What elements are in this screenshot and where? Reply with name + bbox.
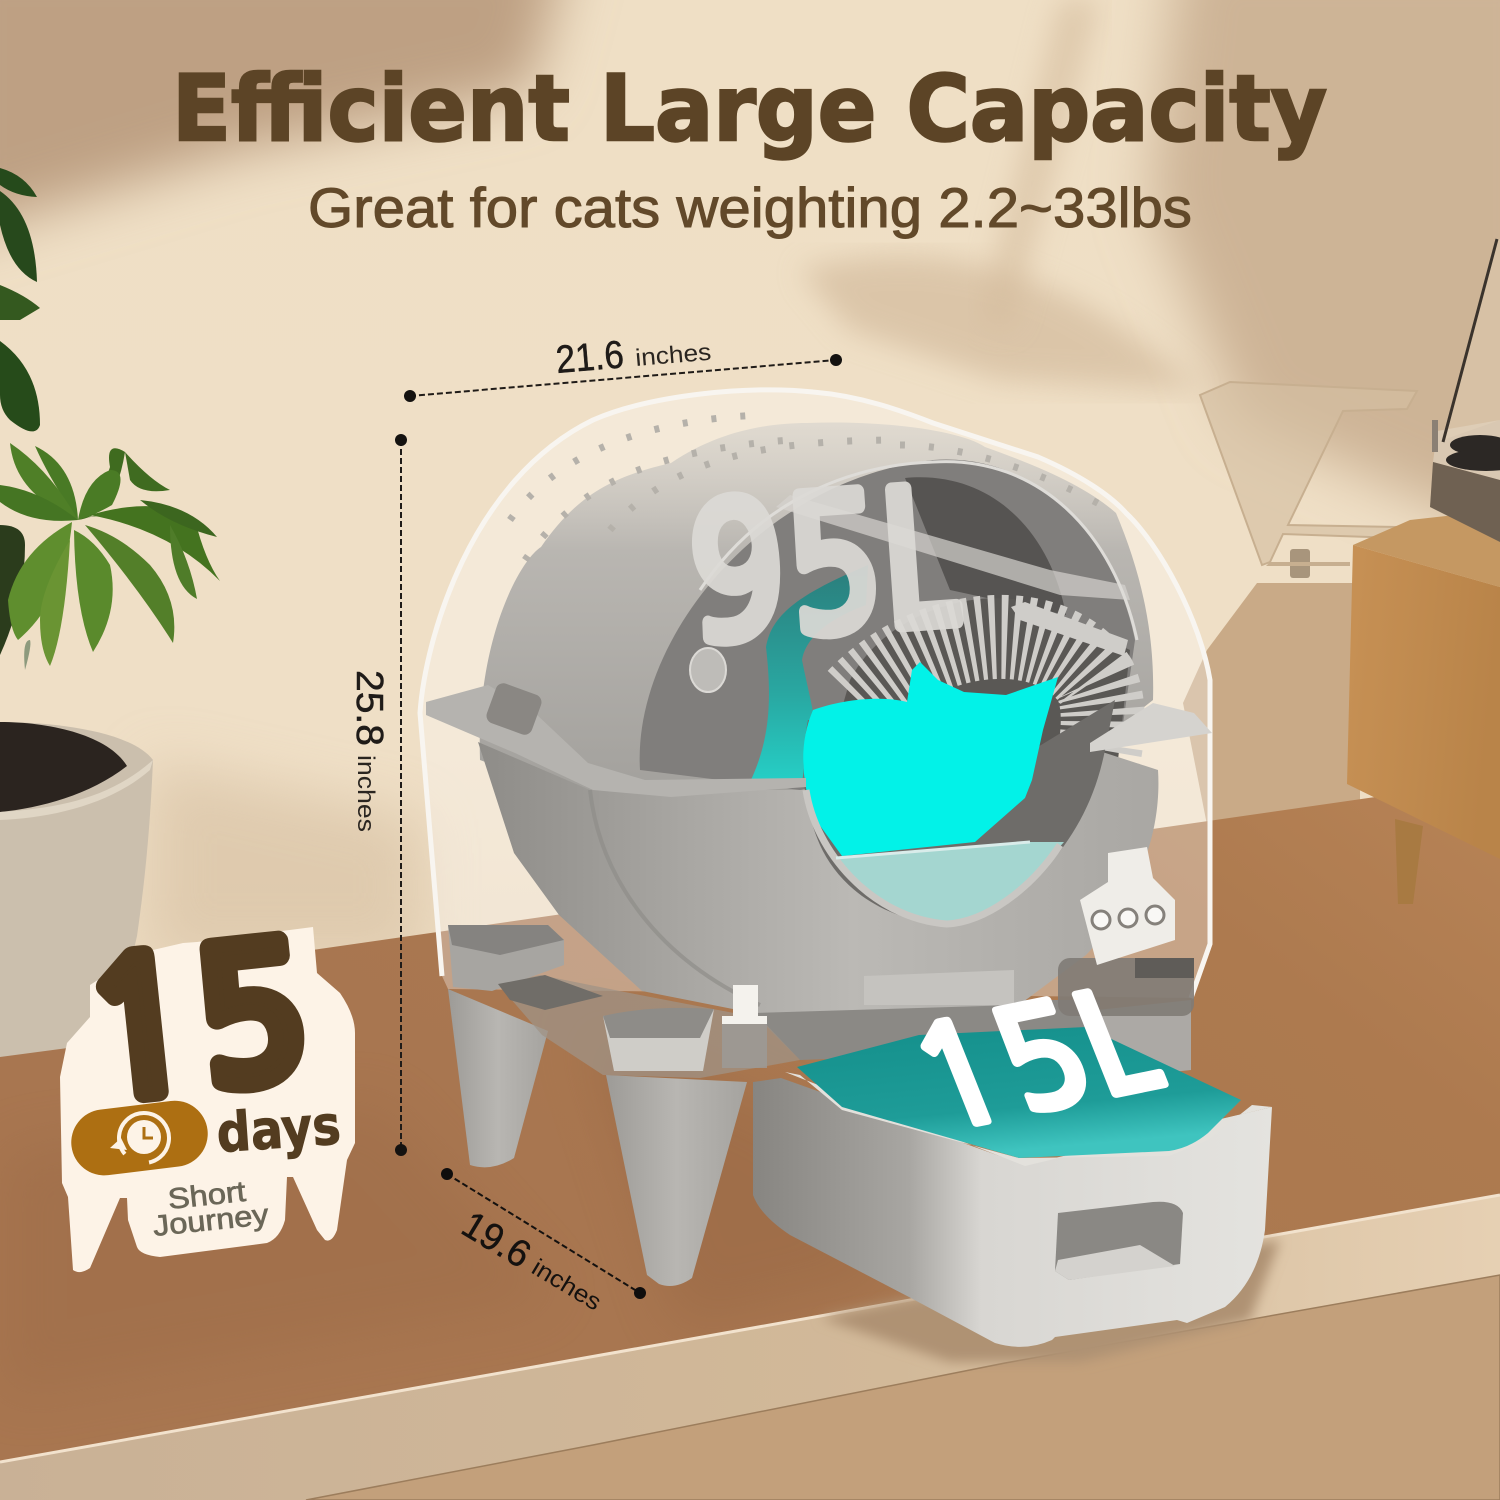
chute	[498, 975, 603, 1010]
dimension: depth: inches	[527, 1254, 606, 1316]
transparent outer dome	[420, 390, 1210, 998]
clear bottle	[722, 1024, 767, 1068]
drawer handle	[1055, 1202, 1183, 1280]
carpet	[306, 1275, 1500, 1500]
base tray	[498, 975, 800, 1078]
window glass ring	[700, 462, 1137, 640]
short journey label: Short	[166, 1176, 247, 1216]
left rim band	[426, 685, 806, 797]
wooden cabinet	[1347, 510, 1500, 904]
plant leaves	[0, 168, 220, 670]
lower entrance glass	[836, 842, 1064, 924]
back leg	[448, 989, 548, 1167]
rake top bar	[1011, 602, 1128, 656]
wooden floor	[0, 779, 1500, 1462]
dimension: depth: 19.6	[454, 1204, 538, 1277]
cream step strip	[0, 1195, 1500, 1500]
right rim band	[1090, 703, 1212, 752]
entrance backing	[803, 700, 1115, 925]
front leg	[606, 1075, 747, 1286]
badge: 15 days short journey: Journey	[151, 1199, 271, 1243]
waste drawer body	[753, 1078, 1272, 1347]
dark interior wedge	[905, 477, 1066, 615]
white knob	[722, 985, 767, 1024]
days label: days	[215, 1093, 343, 1165]
record player lid reflection on wall	[1200, 382, 1417, 578]
dimension: height: inches	[352, 755, 379, 832]
record player	[1430, 239, 1500, 542]
right tank	[1058, 958, 1194, 1016]
right base	[1097, 1000, 1191, 1080]
drawer rim	[785, 1072, 1272, 1166]
control panel	[1080, 847, 1175, 965]
under-sphere fins	[864, 970, 1014, 1005]
drum shell clip marks	[510, 415, 1110, 560]
bowl inner ridge	[590, 790, 760, 1005]
subtitle: Great for cats weighting 2.2~33lbs	[308, 176, 1192, 239]
title: Efficient Large Capacity	[172, 57, 1327, 162]
litter box product	[420, 390, 1272, 1347]
rim hinge	[484, 681, 544, 737]
dimension: width: 21.6	[554, 333, 626, 382]
badge: 15 days short journey	[60, 922, 355, 1272]
wall shadow block behind cabinet	[1183, 583, 1360, 830]
dimension: depth	[441, 1168, 646, 1316]
clock pill	[67, 1097, 212, 1179]
dimension: height: 25.8	[348, 670, 390, 746]
control icons	[1092, 906, 1164, 929]
label: 95L: 95L	[683, 468, 963, 670]
dome outline	[420, 390, 1210, 998]
teal drawer lid	[797, 1027, 1241, 1158]
main sphere bowl	[478, 742, 1158, 1013]
underside shadow	[740, 1000, 1100, 1060]
teal cat silhouette	[803, 662, 1058, 856]
drawer shadow on step	[820, 1240, 1280, 1362]
teal cat tail	[750, 565, 868, 782]
label: 15L: 15L	[893, 971, 1176, 1152]
dimension: width	[404, 333, 842, 402]
interior light strip	[776, 495, 1130, 600]
dimension: height	[348, 434, 407, 1156]
droplet reflection	[690, 648, 726, 692]
badge body	[60, 927, 355, 1272]
dimension: width: inches	[634, 339, 712, 372]
dark drum window	[640, 459, 1135, 790]
clock icon	[109, 1103, 179, 1173]
left water tank	[448, 925, 564, 991]
shelf	[836, 842, 1030, 858]
rake stripes	[858, 637, 1103, 830]
entrance frame	[806, 790, 1060, 924]
step edge highlight	[0, 1195, 1500, 1462]
number 15: 15	[76, 922, 316, 1128]
inner drum shell	[480, 422, 1153, 790]
plant pot	[0, 722, 153, 1057]
inner rake dark bed	[830, 598, 1130, 860]
front tank	[603, 1008, 714, 1071]
